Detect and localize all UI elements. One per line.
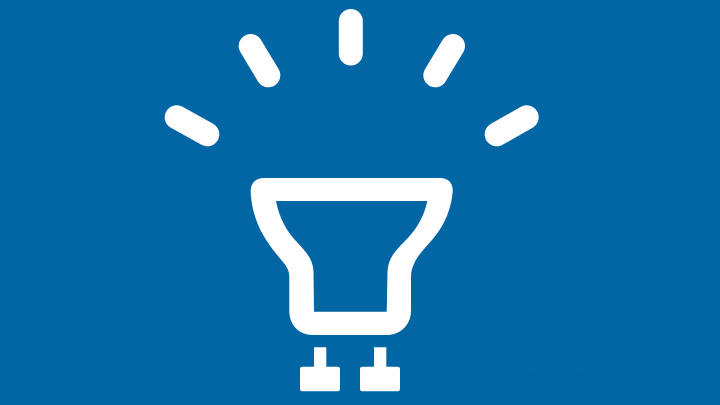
icon: spotlight bulb body xyxy=(251,178,453,335)
icon: left connector pin xyxy=(300,347,340,391)
icon: right connector pin xyxy=(360,347,400,391)
icon: light rays xyxy=(177,21,527,134)
